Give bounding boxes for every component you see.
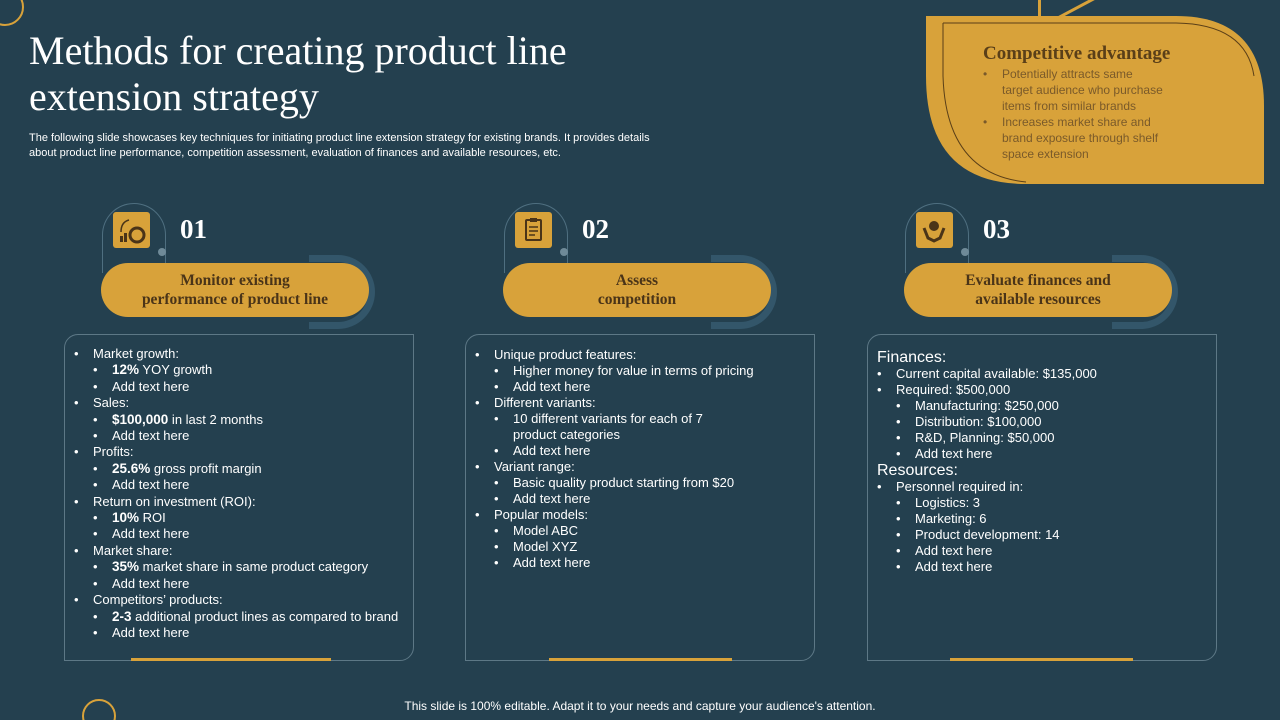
- callout: competitive advantage: target audience who purchase: [1002, 83, 1163, 97]
- panel 2: competition details: Add text here: [513, 491, 590, 506]
- footer note: This slide is 100% editable. Adapt it to your needs and capture your audience's attention.: [404, 699, 876, 713]
- panel 3: finances and resources: Add text here: [915, 446, 992, 461]
- panel 2: competition details: Basic quality product starting from $20: [513, 475, 734, 490]
- panel 2: competition details: Unique product features:: [494, 347, 636, 362]
- step 3 header: [904, 203, 1178, 329]
- panel 1: performance details: Profits:: [93, 444, 133, 459]
- number 02: 02: [582, 214, 609, 244]
- step 1 header: [101, 203, 375, 329]
- icon: clipboard: [515, 212, 552, 248]
- panel 3: finances and resources: Add text here: [915, 543, 992, 558]
- pill: assess: competition: [598, 291, 676, 308]
- pill: monitor: performance of product line: [142, 291, 328, 308]
- panel 1: performance details: Add text here: [112, 625, 189, 640]
- callout: competitive advantage: items from similar brands: [1002, 99, 1136, 113]
- panel 3: finances and resources: Distribution: $100,000: [915, 414, 1041, 429]
- panel 1: performance details: Add text here: [112, 428, 189, 443]
- callout: competitive advantage: •: [983, 115, 987, 129]
- panel 1: performance details: 2-3 additional product lines as compared to brand: [112, 608, 398, 624]
- panel 3: finances and resources: Product development: 14: [915, 527, 1060, 542]
- panel 1: performance details: 10% ROI: [112, 510, 166, 525]
- panel 1: performance details: Competitors’ products:: [93, 592, 223, 607]
- panel 3: finances and resources: Marketing: 6: [915, 511, 987, 526]
- panel 3: finances and resources: R&D, Planning: $50,000: [915, 430, 1054, 445]
- callout: competitive advantage: Competitive advantage: [983, 43, 1170, 64]
- panel 1: performance details: Market share:: [93, 543, 172, 558]
- panel 2: competition details: [465, 334, 815, 661]
- pill: monitor: Monitor existing: [180, 272, 290, 289]
- pill: assess: Assess: [616, 272, 658, 289]
- panel 1: performance details: 12% YOY growth: [112, 362, 212, 377]
- panel 3: finances and resources: Finances:: [877, 349, 946, 366]
- panel 2: competition details: Model XYZ: [513, 539, 577, 554]
- pill: assess: [503, 263, 771, 317]
- panel 2: competition details: Higher money for value in terms of pricing: [513, 363, 754, 378]
- panel 3: finances and resources: Manufacturing: $250,000: [915, 398, 1059, 413]
- panel 1: performance details: Sales:: [93, 395, 129, 410]
- panel 1: performance details: Add text here: [112, 576, 189, 591]
- icon: performance gauge: [113, 212, 150, 248]
- panel 3: finances and resources: Add text here: [915, 559, 992, 574]
- panel 2: competition details: Model ABC: [513, 523, 578, 538]
- panel 2: competition details: 10 different variants for each of 7 product categories: [513, 411, 703, 442]
- panel 2: competition details: Add text here: [513, 555, 590, 570]
- callout: competitive advantage: brand exposure through shelf: [1002, 131, 1158, 145]
- icon: hands with money: [916, 212, 953, 248]
- pill: monitor: [101, 263, 369, 317]
- panel 2: competition details: Add text here: [513, 443, 590, 458]
- panel 1: performance details: Add text here: [112, 526, 189, 541]
- title: Methods for creating product line extension strategy: [29, 28, 567, 119]
- decorative circle bottom-left: [82, 699, 116, 720]
- panel 3: finances and resources: Required: $500,000: [896, 382, 1010, 397]
- decorative circle top-left: [0, 0, 24, 26]
- callout: competitive advantage: Increases market share and: [1002, 115, 1151, 129]
- panel 2: competition details: Add text here: [513, 379, 590, 394]
- panel 1: performance details: 35% market share in same product category: [112, 559, 368, 574]
- panel 1: performance details: $100,000 in last 2 months: [112, 412, 263, 427]
- number 01: 01: [180, 214, 207, 244]
- panel 3: finances and resources: Current capital available: $135,000: [896, 366, 1097, 381]
- panel 3: finances and resources: Personnel required in:: [896, 479, 1023, 494]
- step 2 header: [503, 203, 777, 329]
- callout: competitive advantage: [926, 16, 1264, 184]
- panel 2: competition details: Different variants:: [494, 395, 596, 410]
- number 03: 03: [983, 214, 1010, 244]
- pill: evaluate: Evaluate finances and: [965, 272, 1111, 289]
- panel 3: finances and resources: Resources:: [877, 462, 958, 479]
- subtitle: The following slide showcases key techniques for initiating product line extension strategy for existing brands. It provides details about product line performance, competition assessment, evaluation of finances and available resources, etc.: [29, 132, 650, 159]
- panel 3: finances and resources: [867, 334, 1217, 661]
- panel 1: performance details: 25.6% gross profit margin: [112, 461, 262, 476]
- panel 1: performance details: Add text here: [112, 477, 189, 492]
- pill: evaluate: available resources: [975, 291, 1101, 308]
- panel 1: performance details: Market growth:: [93, 346, 179, 361]
- pill: evaluate: [904, 263, 1172, 317]
- panel 2: competition details: Popular models:: [494, 507, 588, 522]
- panel 1: performance details: [64, 334, 414, 661]
- panel 2: competition details: Variant range:: [494, 459, 575, 474]
- panel 1: performance details: Add text here: [112, 379, 189, 394]
- callout: competitive advantage: Potentially attracts same: [1002, 67, 1133, 81]
- panel 1: performance details: Return on investment (ROI):: [93, 494, 256, 509]
- callout: competitive advantage: •: [983, 67, 987, 81]
- callout: competitive advantage: space extension: [1002, 147, 1089, 161]
- panel 3: finances and resources: Logistics: 3: [915, 495, 980, 510]
